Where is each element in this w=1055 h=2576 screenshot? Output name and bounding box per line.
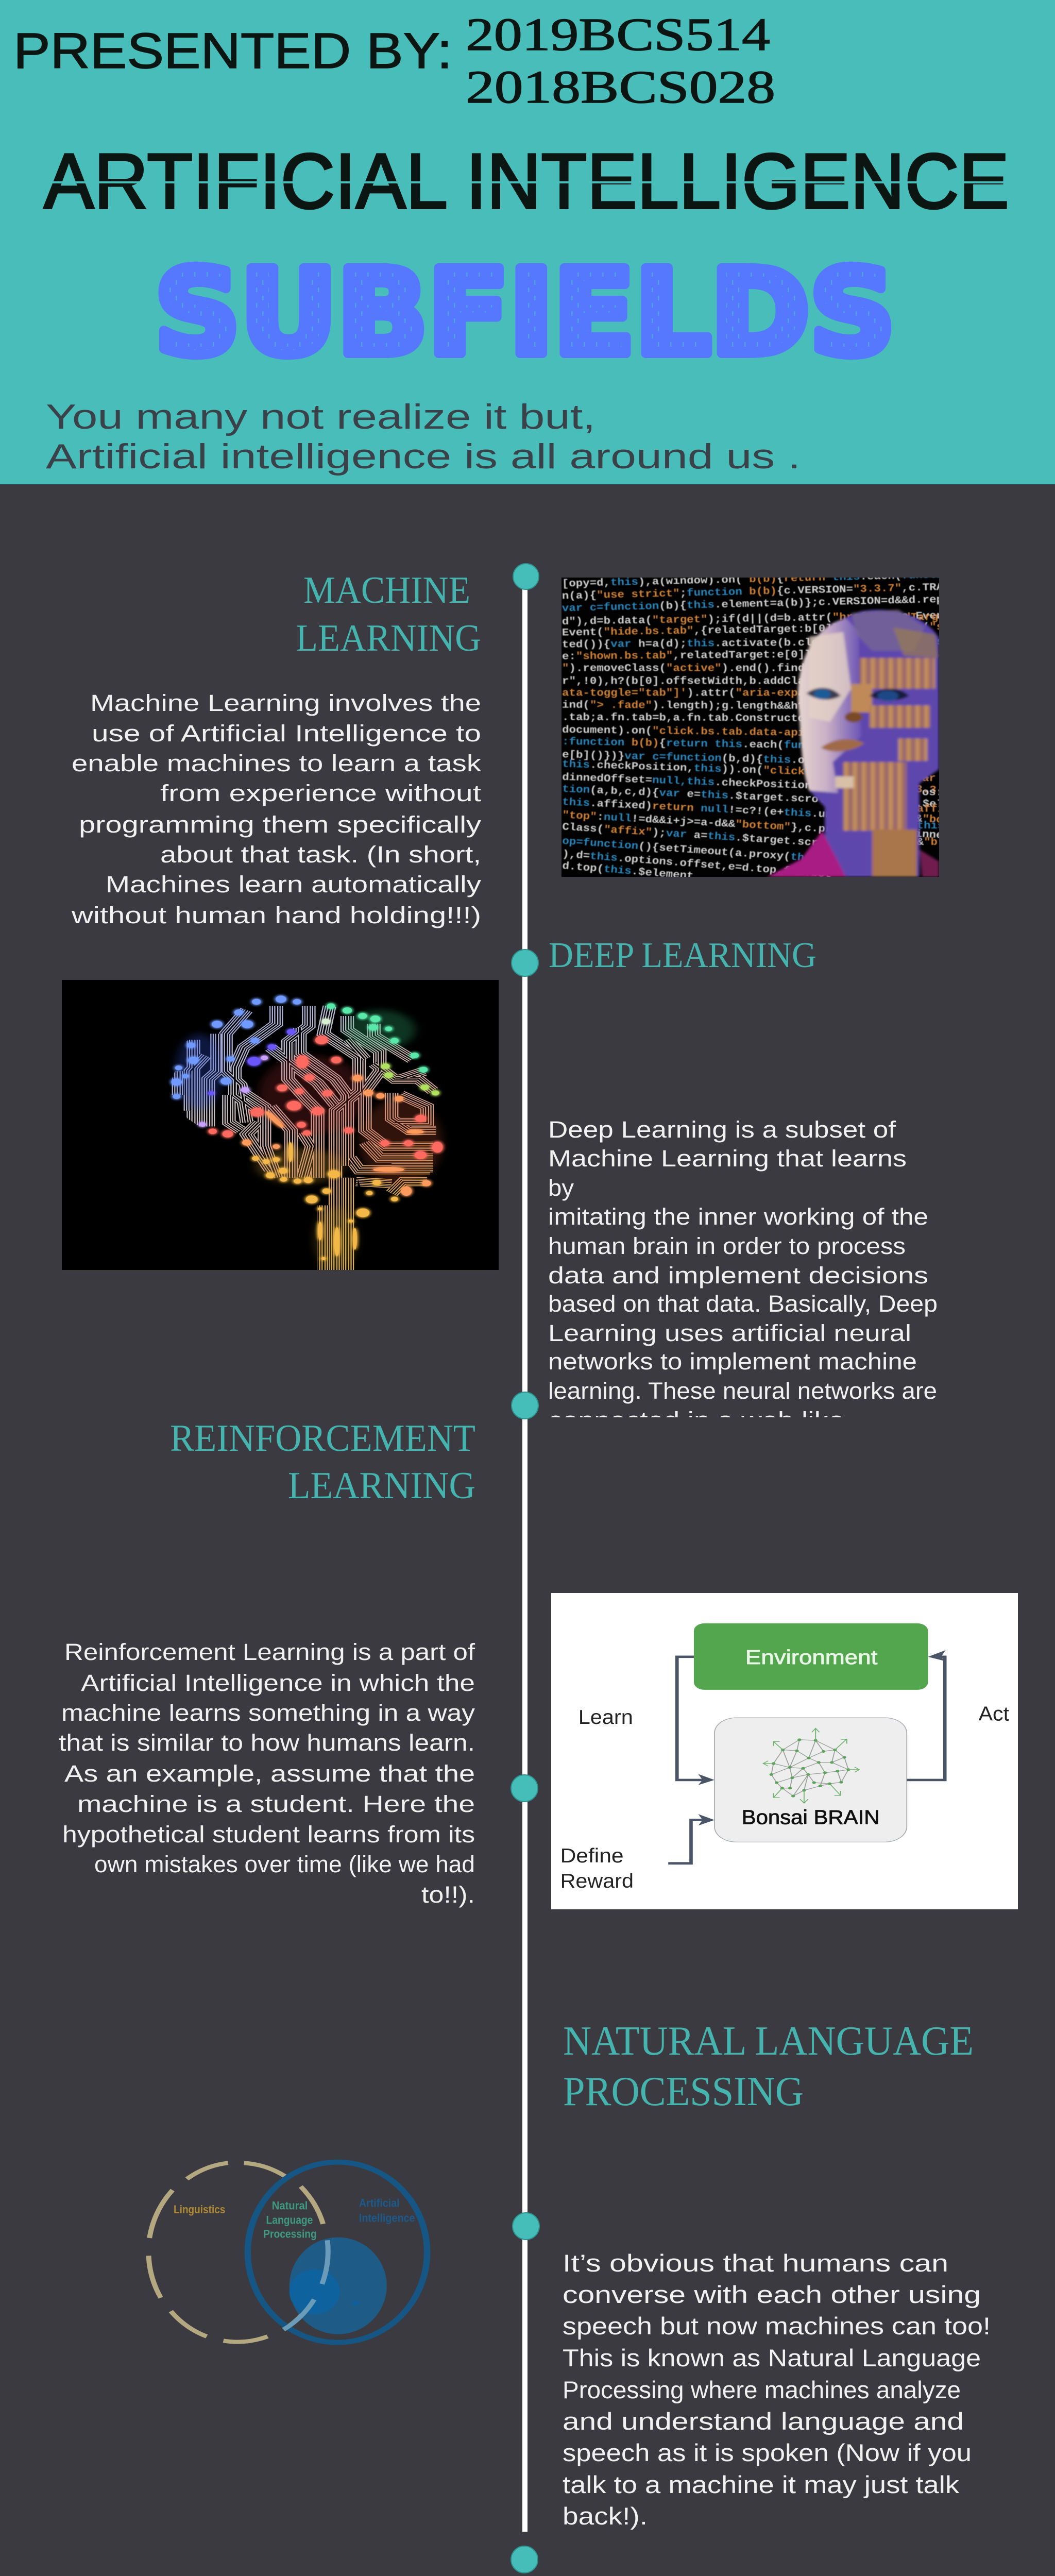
image: code and robot face: ").removeClass("active").end().find('[data-toggle="tab (562, 663, 937, 674)
arrow: define reward (668, 1814, 714, 1863)
timeline line (522, 577, 528, 2532)
tagline: Artificial intelligence is all around us . (46, 437, 801, 476)
image: code and robot face (561, 566, 1055, 883)
text: machine learning description: programming them specifically (79, 811, 482, 838)
text: reinforcement learning description: machine is a student. Here the (77, 1791, 475, 1817)
label: define reward (560, 1844, 634, 1892)
image: code and robot face: this.affixed)return null!=c?!(e+this.unpin<=f.top)&&"bott (562, 796, 957, 827)
arrow: learn (677, 1657, 714, 1785)
collar (767, 831, 846, 877)
heading: deep learning: DEEP LEARNING (549, 936, 816, 975)
label: learn: Learn (578, 1706, 633, 1728)
text: nlp description: Processing where machines analyze (563, 2376, 961, 2403)
environment box: Environment (745, 1646, 878, 1669)
text: reinforcement learning description: own mistakes over time (like we had (94, 1851, 475, 1877)
environment box (694, 1623, 928, 1690)
image: code and robot face: dinnedOffset=null,this.checkPosition());c.VERSION="3.3.7" (562, 772, 957, 797)
header panel (0, 0, 1055, 484)
text: machine learning description (71, 690, 482, 928)
text: deep learning description: Learning uses artificial neural (548, 1320, 911, 1346)
heading: reinforcement learning: REINFORCEMENT (170, 1417, 475, 1460)
image: code and robot face: n(a){"use strict";function b(b){c.VERSION="3.3.7",c.TRANSITION=150 (562, 580, 1019, 602)
section: natural language processing (563, 2018, 991, 2530)
text: nlp description: converse with each other using (563, 2281, 981, 2308)
image: code and robot face: dTarge (904, 612, 945, 623)
arrow: act (907, 1650, 945, 1780)
text: machine learning description: Machines learn automatically (106, 871, 482, 897)
text: reinforcement learning description: machine learns something in a way (61, 1700, 475, 1726)
text: machine learning description: about that task. (In short, (160, 841, 481, 868)
text: deep learning description: Machine Learning that learns (548, 1145, 907, 1172)
heading: machine learning (296, 569, 481, 659)
heading: machine learning: LEARNING (296, 617, 481, 659)
brain box (714, 1718, 907, 1842)
title: subfields: SUBFIELDS (155, 244, 895, 381)
text: nlp description: and understand language and (563, 2408, 964, 2435)
heading: reinforcement learning: LEARNING (288, 1465, 475, 1507)
network icon (763, 1728, 859, 1803)
heading: machine learning: MACHINE (303, 569, 470, 612)
text: deep learning description: based on that data. Basically, Deep (548, 1291, 938, 1317)
text: nlp description: back!). (563, 2502, 648, 2530)
diagram: bonsai brain reinforcement loop (551, 1593, 1018, 1909)
image: code and robot face: e[b]()})}var c=function(b,d){this.options=a.extend({} (562, 749, 930, 769)
text: nlp description: talk to a machine it may just talk (563, 2471, 960, 2498)
text: machine learning description: Machine Learning involves the (90, 690, 481, 716)
text: machine learning description: use of Artificial Intelligence to (92, 720, 481, 747)
image: code and robot face: Event("hide.bs.tab",{relatedTarget:b[0]})),g=a.Event("show.bs (562, 621, 985, 639)
tagline: You many not realize it but, (46, 397, 595, 436)
timeline (511, 564, 539, 2573)
text: nlp description: It’s obvious that humans can (563, 2249, 948, 2277)
image: code and robot face: ata-toggle="tab"]').attr("aria-expanded",!0),e&&e()}va (562, 688, 937, 699)
text: nlp description: speech but now machines can too! (563, 2312, 991, 2340)
text: machine learning description: enable machines to learn a task (72, 750, 482, 776)
heading: natural language processing: NATURAL LANGUAGE (563, 2018, 974, 2064)
text: deep learning description: by (548, 1175, 574, 1201)
label: linguistics: Linguistics (174, 2204, 225, 2216)
section: reinforcement learning (59, 1417, 475, 1908)
text: reinforcement learning description: hypothetical student learns from its (62, 1821, 475, 1848)
text: reinforcement learning description: Artificial Intelligence in which the (81, 1670, 475, 1696)
text: deep learning description: imitating the inner working of the (548, 1204, 928, 1230)
image: code and robot face: op=function(){setTimeout(a.proxy(this.checkPos (561, 836, 881, 869)
text: deep learning description: networks to implement machine (548, 1348, 917, 1375)
linguistics dashed ring (149, 2163, 323, 2342)
text: deep learning description: connected in a web like (548, 1407, 844, 1433)
text: reinforcement learning description: Reinforcement Learning is a part of (64, 1639, 475, 1665)
image: code and robot face: &"b (917, 837, 938, 849)
roll numbers (466, 9, 775, 113)
text: deep learning description (548, 1116, 938, 1433)
image: code and robot face: :function b(b){return this.each(function(){var d=a(thi (562, 736, 937, 754)
ai ring (248, 2162, 427, 2343)
label: define reward: Define (560, 1844, 624, 1867)
image: code and robot face: r",!0),h?(b[0].offsetWidth,b.addClass("in")):b.removeC (562, 676, 937, 687)
text: deep learning description: Deep Learning is a subset of (548, 1116, 896, 1143)
label: natural language processing: Processing (263, 2228, 317, 2241)
image: code and robot face: ted()){var h=a(d);this.activate(b.closest("li"),c),this.a (562, 636, 958, 651)
roll numbers: 2019BCS514 (466, 9, 770, 60)
image: code and robot face: tion(a,b,c,d){var e=this.$target.scrollTop(),f=this.$elem (562, 784, 958, 811)
image: code and robot face: d"),d=b.data("target");if(d||(d=b.attr("href"),g=a.Event( (562, 610, 957, 628)
timeline dots (511, 564, 539, 2573)
ai filled ellipse (290, 2238, 387, 2334)
image: code and robot face: ar (922, 773, 936, 785)
text: nlp description: speech as it is spoken (Now if you (563, 2439, 972, 2466)
text: deep learning description: data and implement decisions (548, 1262, 928, 1289)
label: artificial intelligence: Artificial (359, 2197, 400, 2210)
text: deep learning description: learning. These neural networks are (548, 1378, 937, 1404)
label: natural language processing (263, 2200, 317, 2241)
image: code and robot face: .tab;a.fn.tab=b,a.fn.tab.Constructor=c,a.fn.tab.noCon (562, 711, 930, 725)
label: define reward: Reward (560, 1870, 634, 1892)
text: reinforcement learning description: As an example, assume that the (64, 1760, 475, 1787)
roll numbers: 2018BCS028 (466, 62, 775, 113)
text: reinforcement learning description (59, 1639, 475, 1908)
image: code and robot face: Class("affix");var a=this.$target.scrollTop(),b=thi (562, 821, 915, 855)
small dot (352, 2300, 359, 2306)
image: code and robot face: d.top(this.$element (561, 860, 694, 883)
heading: natural language processing: PROCESSING (563, 2068, 804, 2114)
text: deep learning description: human brain in order to process (548, 1233, 906, 1259)
text: nlp description: This is known as Natural Language (563, 2344, 981, 2371)
text: machine learning description: from experience without (160, 780, 482, 806)
tagline (46, 397, 801, 476)
head base (798, 610, 939, 877)
image: circuit brain (62, 980, 499, 1270)
brain box: Bonsai BRAIN (742, 1806, 880, 1828)
image: code and robot face: "top":null!=d&&i+j>=a-d&&"bottom"},c.prototype.getPinne (562, 809, 943, 841)
heading: natural language processing (563, 2018, 974, 2114)
heading: reinforcement learning (170, 1417, 475, 1507)
image: code and robot face: document).on("click.bs.tab.data-api",'[data-toggle="ta (562, 724, 937, 741)
text: machine learning description: without human hand holding!!!) (71, 902, 481, 928)
text: reinforcement learning description: that is similar to how humans learn. (59, 1730, 475, 1756)
image: code and robot face: e:"shown.bs.tab",relatedTarget:e[0]})})}}},c.prototype. (562, 648, 943, 663)
label: natural language processing: Language (266, 2214, 313, 2227)
image: code and robot face: this.checkPosition,this)).on("click.bs.affix.data-api (562, 758, 930, 782)
image: code and robot face: var c=function(b){this.element=a(b)};c.VERSION=d&&d.replace(/.*/ (562, 592, 1006, 615)
title: artificial intelligence: ARTIFICIAL INTELLIGENCE (44, 138, 1009, 225)
venn diagram: linguistics, nlp, ai (146, 2160, 431, 2345)
image: code and robot face: this (917, 820, 944, 832)
section: deep learning (548, 936, 938, 1433)
label: natural language processing: Natural (272, 2200, 308, 2212)
image: code and robot face: ind("> .fade").length);g.length&&h?g.one("bsTransition (562, 700, 937, 713)
image: code and robot face: affi (917, 804, 944, 815)
text: nlp description (563, 2249, 991, 2530)
ring overlap segments (284, 2240, 328, 2330)
header background (0, 0, 1055, 484)
inner ellipse (290, 2269, 340, 2314)
image: code and robot face: ),d=this.options.offset,e=d.top,f=d.bot (561, 849, 832, 880)
section: machine learning (71, 569, 482, 928)
label: artificial intelligence (359, 2197, 415, 2225)
text: reinforcement learning description: to!!). (421, 1882, 475, 1908)
presented by label: PRESENTED BY: (13, 23, 452, 79)
image: code and robot face: os: (922, 787, 943, 799)
